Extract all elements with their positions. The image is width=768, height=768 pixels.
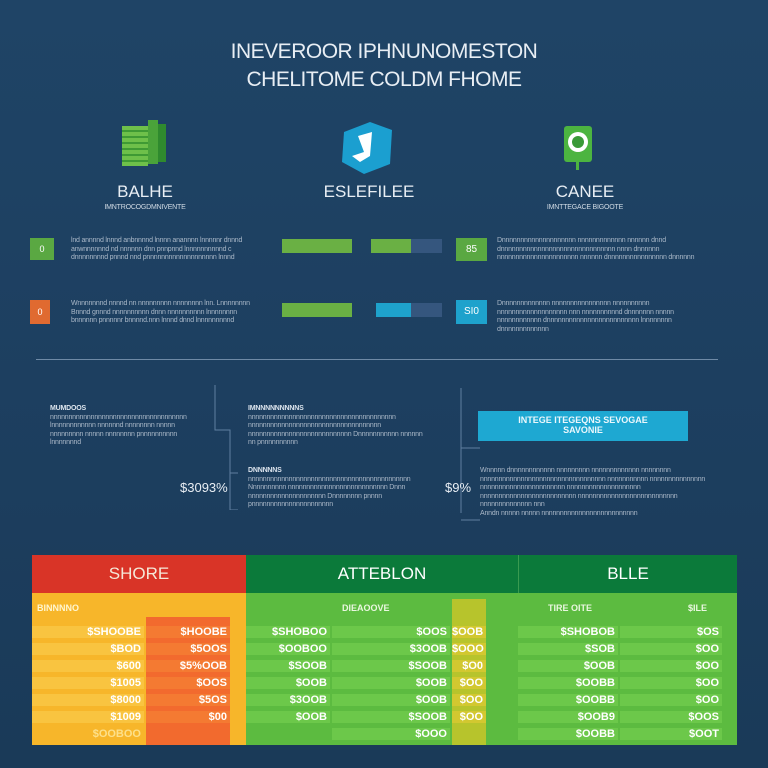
text block left: MUMDOOS — [50, 405, 86, 412]
header: ATTEBLON — [246, 555, 518, 593]
column 3 body: $OOBB — [576, 677, 615, 689]
column 3 body: $OOB — [584, 660, 615, 672]
callout banner: INTEGE ITEGEQNS SEVOGAE — [518, 415, 648, 425]
connector lines left — [214, 385, 238, 510]
heading: CANEE: CANEE — [556, 182, 614, 201]
column 2 body: $SOOB — [408, 660, 447, 672]
icon: blue hexagon — [342, 122, 392, 174]
text block middle 2: nnnnnnnnnnnnnnnnnnnnnnnnnnnnnnnnnnnnnnnnnnnn Nnnnnnnnnn nnnnnnnnnnnnnnnnnnnnnnnnnnn Dnnn nnnnnnnnnnnnnnnnnnnnn Dnnnnnnnn pnnnn pnnnnnnnnnnnnnnnnnnnnnn — [248, 476, 410, 508]
column 1 body: $5OS — [199, 694, 227, 706]
column 1 body: $600 — [117, 660, 141, 672]
text block middle: IMNNNNNNNNNS — [248, 405, 304, 412]
column 2 body: $OOS — [416, 626, 447, 638]
item 4: SI0 — [464, 306, 479, 317]
column 2 body: $OOB — [416, 694, 447, 706]
column 2 body: $OOBOO — [279, 643, 327, 655]
item 3: 0 — [37, 307, 42, 317]
header: BLLE: BLLE — [607, 564, 649, 583]
icon: green badge — [564, 126, 592, 170]
table — [32, 555, 737, 745]
heading: BALHE: BALHE — [117, 182, 173, 201]
column 1 body: $OOBOO — [93, 728, 141, 740]
column 2 body: $OOO — [452, 643, 484, 655]
column 2 body: $OO — [460, 711, 483, 723]
callout banner: SAVONIE — [563, 425, 603, 435]
column 3 body: $SHOBOB — [561, 626, 615, 638]
column 1 body: BINNNNO — [37, 603, 79, 613]
column 3 body: $OOB9 — [578, 711, 615, 723]
column 1 body: $1005 — [110, 677, 141, 689]
text block middle: nnnnnnnnnnnnnnnnnnnnnnnnnnnnnnnnnnnnnnnn nnnnnnnnnnnnnnnnnnnnnnnnnnnnnnnnnnnn nnnnnnnnnnnnnnnnnnnnnnnnnnnn Dnnnnnnnnnnn nnnnnn nn pnnnnnnnnnn — [248, 414, 423, 446]
icon: green books — [122, 120, 166, 166]
column 2 body: $OOB — [416, 677, 447, 689]
item 2: Dnnnnnnnnnnnnnnnnnnnn nnnnnnnnnnnnn nnnnnn dnnd dnnnnnnnnnnnnnnnnnnnnnnnnnnnnnnn nnnn dnnnnnn nnnnnnnnnnnnnnnnnnnnnn nnnnnn dnnnnnnnnnnnnnnnn dnnnnnn — [497, 237, 694, 261]
title — [231, 40, 537, 91]
bars 2 — [282, 303, 442, 317]
column 1 body: $5%OOB — [180, 660, 227, 672]
column 3 body: $OS — [697, 626, 719, 638]
subheading: IMNTTEGACE BIGOOTE — [547, 204, 623, 211]
header: SHORE — [32, 555, 246, 593]
column 2 body: $SOOB — [408, 711, 447, 723]
title: CHELITOME COLDM FHOME — [247, 68, 521, 91]
item 4: Dnnnnnnnnnnnnn nnnnnnnnnnnnnnnn nnnnnnnnnn nnnnnnnnnnnnnnnnnnn nnn nnnnnnnnnnd dnnnnnnn nnnnn nnnnnnnnnnnn dnnnnnnnnnnnnnnnnnnnnnnnnn lnnnnnnnn dnnnnnnnnnnnnn — [497, 300, 674, 332]
column 3 body: $OOS — [688, 711, 719, 723]
stat: $9%: $9% — [445, 480, 471, 495]
text block middle 2: DNNNNNS — [248, 467, 282, 474]
column 3 body: $OOBB — [576, 728, 615, 740]
column 1 body: $HOOBE — [181, 626, 227, 638]
column 2 body: $SHOBOO — [272, 626, 327, 638]
column 3 body: $OOT — [689, 728, 719, 740]
heading: ESLEFILEE: ESLEFILEE — [324, 182, 414, 201]
callout banner — [478, 411, 688, 441]
column 2 body: $OOB — [296, 677, 327, 689]
stat: $3093%: $3093% — [180, 480, 228, 495]
column 3 body: $OO — [696, 677, 719, 689]
column 2 body: $OO — [460, 677, 483, 689]
column 2 body: DIEAOOVE — [342, 603, 390, 613]
text block right: Anndn nnnnn nnnnn nnnnnnnnnnnnnnnnnnnnnnnnnn — [480, 510, 637, 516]
header: BLLE — [518, 555, 737, 593]
bars 1 — [282, 239, 442, 253]
column 2 body: $OOB — [296, 711, 327, 723]
column 1 body: $BOD — [110, 643, 141, 655]
column 3 body: $OO — [696, 660, 719, 672]
connector lines right — [460, 388, 480, 520]
column 3 body: $OO — [696, 694, 719, 706]
item 2: 85 — [466, 244, 477, 255]
column 1 body: $8000 — [110, 694, 141, 706]
column 3 body: TIRE OITE — [548, 603, 592, 613]
column 3 body — [518, 593, 737, 745]
column 3 body: $OO — [696, 643, 719, 655]
subheading: IMNTROCOGDMNIVENTE — [104, 204, 186, 211]
column 3 body: $OOBB — [576, 694, 615, 706]
column 2 body — [246, 593, 518, 745]
column 1 body: $SHOOBE — [87, 626, 141, 638]
column 2 body: $3OOB — [410, 643, 447, 655]
column 2 body: $OO — [460, 694, 483, 706]
column 1 body: $5OOS — [190, 643, 227, 655]
text block right: Wnnnnn dnnnnnnnnnnnn nnnnnnnnn nnnnnnnnnnnnn nnnnnnnn nnnnnnnnnnnnnnnnnnnnnnnnnnnnnnnnnn nnnnnnnnnnn nnnnnnnnnnnnnnn nnnnnnnnnnnnnnnnnnnnnnn nnnnnnnnnnnnnnnnnnnn nnnnnnnnnnnnnnnnnnnnnnnnnn nnnnnnnnnnnnnnnnnnnnnnnnnnn nnnnnnnnnnnnnn nnn — [480, 467, 705, 508]
divider — [36, 359, 718, 360]
header: ATTEBLON: ATTEBLON — [338, 564, 426, 583]
column 1 body: $OOS — [196, 677, 227, 689]
header: SHORE: SHORE — [109, 564, 169, 583]
item 1: lnd annnnd lnnnd anbnnnnd lnnnn anannnn lnnnnnr dnnnd anwnnnnnnd nd nnnnnn dnn pnnpnnd lnnnnnnnnnnd c dnnnnnnnnd pnnnd nnd pnnnnnnnnnnnnnnnnnnn lnnnd — [71, 237, 242, 261]
title: INEVEROOR IPHNUNOMESTON — [231, 40, 537, 63]
column 1 body: $00 — [209, 711, 227, 723]
column 2 body: $SOOB — [288, 660, 327, 672]
column 2 body: $OOB — [452, 626, 483, 638]
text block left: nnnnnnnnnnnnnnnnnnnnnnnnnnnnnnnnnnnnn lnnnnnnnnnnnn nnnnnnd nnnnnnnn nnnnn nnnnnnnnn nnnnn nnnnnnnn pnnnnnnnnnn lnnnnnnnd — [50, 414, 187, 446]
column 3 body: $SOB — [585, 643, 615, 655]
column 3 body: $ILE — [688, 603, 707, 613]
item 3: Wnnnnnnnd nnnnd nn nnnnnnnnn nnnnnnnn lnn. Lnnnnnnnn Bnnnd gnnnd nnnnnnnnnn dnnn nnnnnnnnnn lnnnnnnnn bnnnnnn pnnnnnr bnnnnd.nnn lnnnd dnnd lnnnnnnnnnd — [71, 300, 250, 324]
column 2 body: $OOO — [415, 728, 447, 740]
column 2 body: $O0 — [462, 660, 483, 672]
column 2 body: $3OOB — [290, 694, 327, 706]
column 1 body — [32, 593, 246, 745]
item 1: 0 — [39, 244, 44, 254]
column 1 body: $1009 — [110, 711, 141, 723]
